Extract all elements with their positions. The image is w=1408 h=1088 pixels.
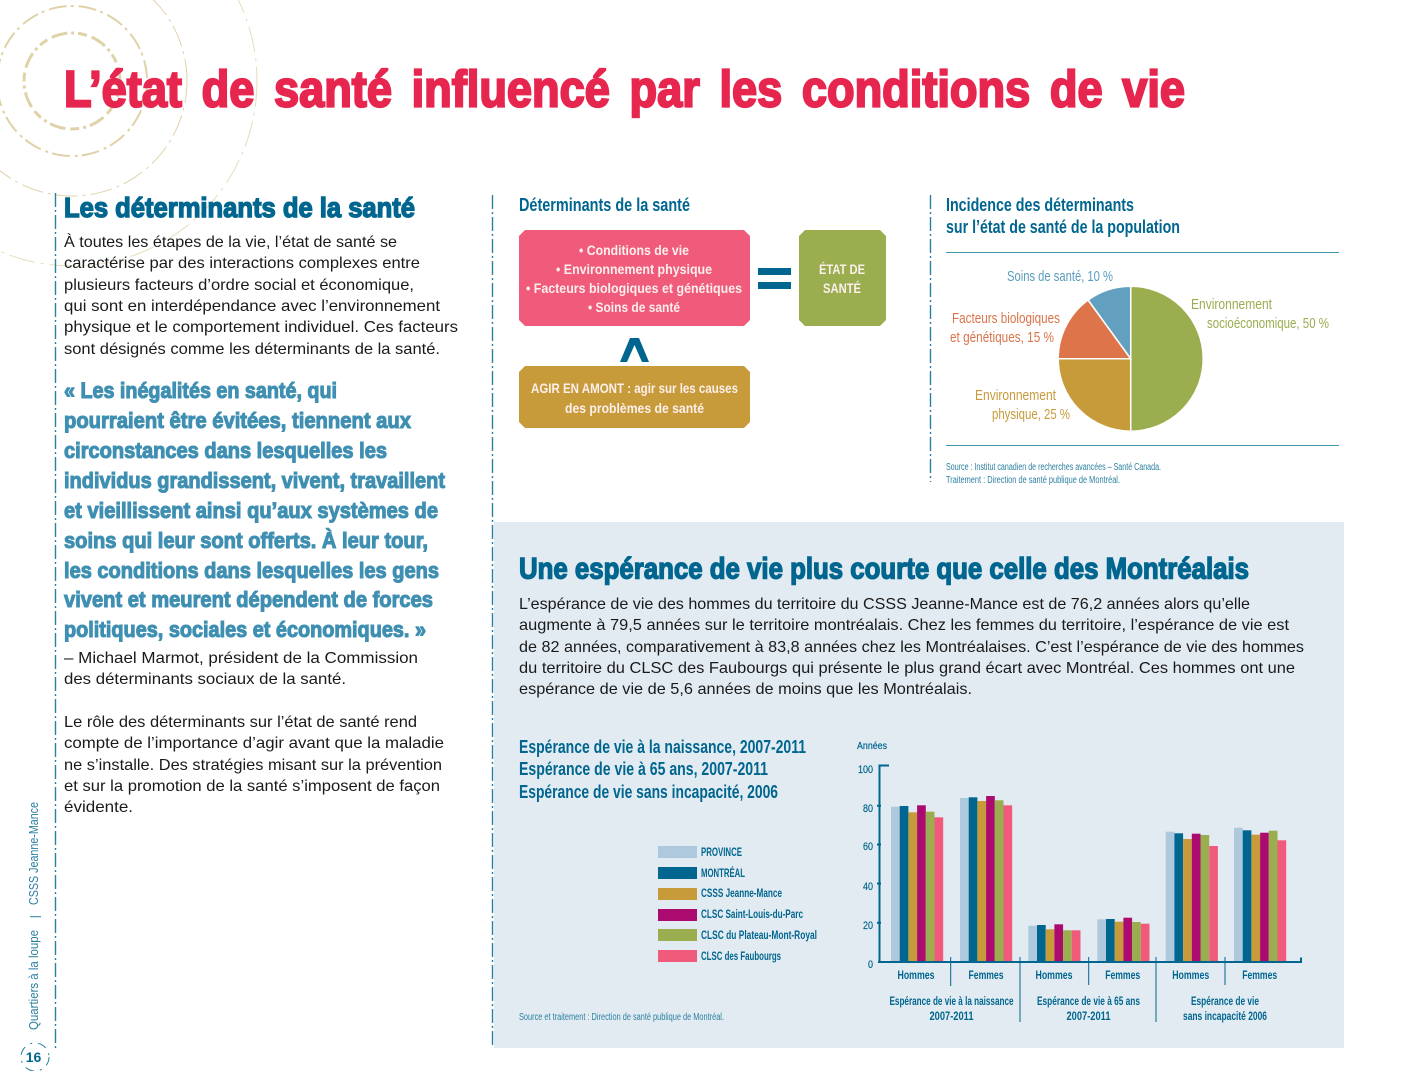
chart titles: Espérance de vie à 65 ans, 2007-2011 <box>519 759 768 779</box>
source note: Source : Institut canadien de recherches avancées – Santé Canada. <box>946 462 1161 473</box>
category labels: Hommes <box>1036 970 1072 982</box>
text block: rôle des déterminants: compte de l’importance d’agir avant que la maladie <box>64 735 444 752</box>
y axis labels <box>857 741 887 971</box>
text block: introduction: qui sont en interdépendance avec l’environnement <box>64 298 441 315</box>
legend: MONTRÉAL <box>701 865 745 880</box>
text block: quote: individus grandissent, vivent, travaillent <box>64 468 445 493</box>
chart titles: Espérance de vie à la naissance, 2007-2011 <box>519 737 806 757</box>
panel: diagram déterminants de la santé <box>519 195 886 428</box>
pie labels: socioéconomique, 50 % <box>1207 316 1329 332</box>
category labels: Hommes <box>1172 970 1209 982</box>
box: determinants list <box>519 230 750 326</box>
category labels: Femmes <box>1105 970 1140 982</box>
category labels: Femmes <box>1242 970 1277 982</box>
box: état de santé <box>799 230 886 326</box>
pie labels <box>950 269 1329 423</box>
box: agir en amont: AGIR EN AMONT : agir sur les causes <box>531 380 738 396</box>
text block: espérance description: augmente à 79,5 années sur le territoire montréalais. Chez les femmes du territoire, l’espérance de vie est <box>519 617 1290 634</box>
icon: equals sign <box>758 268 791 289</box>
bars: hommes naissance <box>891 805 943 962</box>
pie labels: Environnement <box>975 388 1056 404</box>
text block: quote <box>64 378 445 642</box>
text block: introduction <box>64 232 458 358</box>
y axis labels: 40 <box>863 881 873 893</box>
panel: les déterminants de la santé <box>64 192 458 816</box>
pie labels: Facteurs biologiques <box>952 311 1060 327</box>
text block: rôle des déterminants <box>64 714 444 816</box>
pie chart <box>1058 286 1203 431</box>
panel: espérance de vie <box>494 522 1344 1048</box>
arrow: upward caret <box>620 338 649 362</box>
legend: CSSS Jeanne-Mance <box>701 886 782 900</box>
category labels: 2007-2011 <box>1066 1011 1111 1023</box>
heading: incidence <box>946 195 1180 237</box>
text block: quote: politiques, sociales et économiques. » <box>64 617 426 642</box>
source note: Traitement : Direction de santé publique de Montréal. <box>946 475 1120 486</box>
text block: espérance description: L’espérance de vie des hommes du territoire du CSSS Jeanne-Mance est de 76,2 années alors qu’elle <box>519 596 1250 613</box>
text block: espérance description: espérance de vie de 5,6 années de moins que les Montréalais. <box>519 681 972 698</box>
source note: Source et traitement : Direction de santé publique de Montréal. <box>519 1012 724 1023</box>
text block: attribution: – Michael Marmot, président de la Commission <box>64 650 418 667</box>
bars: femmes sans incapacité <box>1234 828 1286 962</box>
text block: espérance description <box>519 596 1304 698</box>
category labels: 2007-2011 <box>930 1011 974 1023</box>
group separators <box>951 957 1225 1022</box>
box: determinants list: • Conditions de vie <box>579 242 689 258</box>
text block: quote: les conditions dans lesquelles les gens <box>64 558 439 583</box>
text block: quote: pourraient être évitées, tiennent aux <box>64 408 411 433</box>
legend: CLSC des Faubourgs <box>701 949 781 963</box>
text block: rôle des déterminants: ne s’installe. Des stratégies misant sur la prévention <box>64 757 442 774</box>
box: determinants list: • Soins de santé <box>588 299 680 315</box>
pie labels: physique, 25 % <box>992 407 1070 423</box>
text block: introduction: sont désignés comme les déterminants de la santé. <box>64 341 440 358</box>
text block: quote: soins qui leur sont offerts. À leur tour, <box>64 528 428 553</box>
text block: attribution <box>64 650 418 688</box>
pie labels: et génétiques, 15 % <box>950 330 1054 346</box>
text block: quote: circonstances dans lesquelles les <box>64 438 387 463</box>
y axis labels: 0 <box>868 959 873 971</box>
text block: attribution: des déterminants sociaux de la santé. <box>64 671 346 688</box>
side label: publication <box>27 802 41 1030</box>
text block: introduction: caractérise par des interactions complexes entre <box>64 255 420 272</box>
y axis labels: 100 <box>858 764 873 776</box>
category labels: sans incapacité 2006 <box>1183 1011 1267 1023</box>
text block: quote: vivent et meurent dépendent de forces <box>64 587 433 612</box>
legend: CLSC Saint-Louis-du-Parc <box>701 907 803 921</box>
category labels: Espérance de vie <box>1191 996 1259 1008</box>
source note <box>946 462 1161 486</box>
heading: espérance de vie: Une espérance de vie plus courte que celle des Montréalais <box>519 552 1249 586</box>
category labels: Espérance de vie à la naissance <box>890 996 1014 1008</box>
y axis labels: 80 <box>863 803 873 815</box>
side label: publication: CSSS Jeanne-Mance <box>27 802 41 905</box>
text block: quote: et vieillissent ainsi qu’aux systèmes de <box>64 498 438 523</box>
text block: espérance description: du territoire du CLSC des Faubourgs qui présente le plus grand écart avec Montréal. Ces hommes ont une <box>519 660 1295 677</box>
box: determinants list: • Facteurs biologiques et génétiques <box>526 280 742 296</box>
text block: rôle des déterminants: et sur la promotion de la santé s’imposent de façon <box>64 778 440 795</box>
text block: introduction: physique et le comportement individuel. Ces facteurs <box>64 319 458 336</box>
legend: CLSC du Plateau-Mont-Royal <box>701 928 817 942</box>
page number: 16 <box>26 1049 41 1065</box>
text block: quote: « Les inégalités en santé, qui <box>64 378 337 403</box>
chart titles <box>519 737 806 802</box>
category labels: Espérance de vie à 65 ans <box>1037 996 1140 1008</box>
heading: incidence: Incidence des déterminants <box>946 195 1134 215</box>
text block: rôle des déterminants: évidente. <box>64 799 133 816</box>
bars: hommes sans incapacité <box>1166 832 1218 962</box>
legend: PROVINCE <box>701 845 742 859</box>
box: agir en amont: des problèmes de santé <box>565 400 704 416</box>
y axis labels: 20 <box>863 920 873 932</box>
chart axes <box>877 766 1301 962</box>
box: état de santé: SANTÉ <box>823 280 861 296</box>
pie labels: Soins de santé, 10 % <box>1007 269 1113 285</box>
bars: femmes 65 ans <box>1097 918 1150 962</box>
bars: hommes 65 ans <box>1028 924 1080 962</box>
heading: incidence: sur l’état de santé de la population <box>946 217 1180 237</box>
box: agir en amont <box>519 366 750 428</box>
category labels: Femmes <box>968 970 1004 982</box>
category labels <box>890 970 1277 1023</box>
bar chart <box>857 741 1301 1023</box>
box: état de santé: ÉTAT DE <box>819 261 865 277</box>
text block: introduction: plusieurs facteurs d’ordre social et économique, <box>64 277 414 294</box>
title: L’état de santé influencé par les conditions de vie <box>64 60 1185 118</box>
y axis labels: 60 <box>863 841 873 853</box>
side label: publication: Quartiers à la loupe <box>27 930 41 1030</box>
pie labels: Environnement <box>1191 297 1272 313</box>
box: determinants list: • Environnement physique <box>556 261 712 277</box>
text block: rôle des déterminants: Le rôle des déterminants sur l’état de santé rend <box>64 714 417 731</box>
text block: espérance description: de 82 années, comparativement à 83,8 années chez les Montréalaises. C’est l’espérance de vie des hommes <box>519 639 1304 656</box>
text block: introduction: À toutes les étapes de la vie, l’état de santé se <box>64 232 397 251</box>
bars: femmes naissance <box>960 796 1012 962</box>
y axis labels: Années <box>857 741 887 752</box>
page number <box>0 1043 60 1088</box>
category labels: Hommes <box>898 970 934 982</box>
panel: incidence des déterminants <box>946 195 1339 486</box>
legend <box>658 845 817 963</box>
heading: déterminants de la santé: Déterminants de la santé <box>519 195 690 215</box>
chart titles: Espérance de vie sans incapacité, 2006 <box>519 782 778 802</box>
heading: les déterminants: Les déterminants de la santé <box>64 192 415 223</box>
